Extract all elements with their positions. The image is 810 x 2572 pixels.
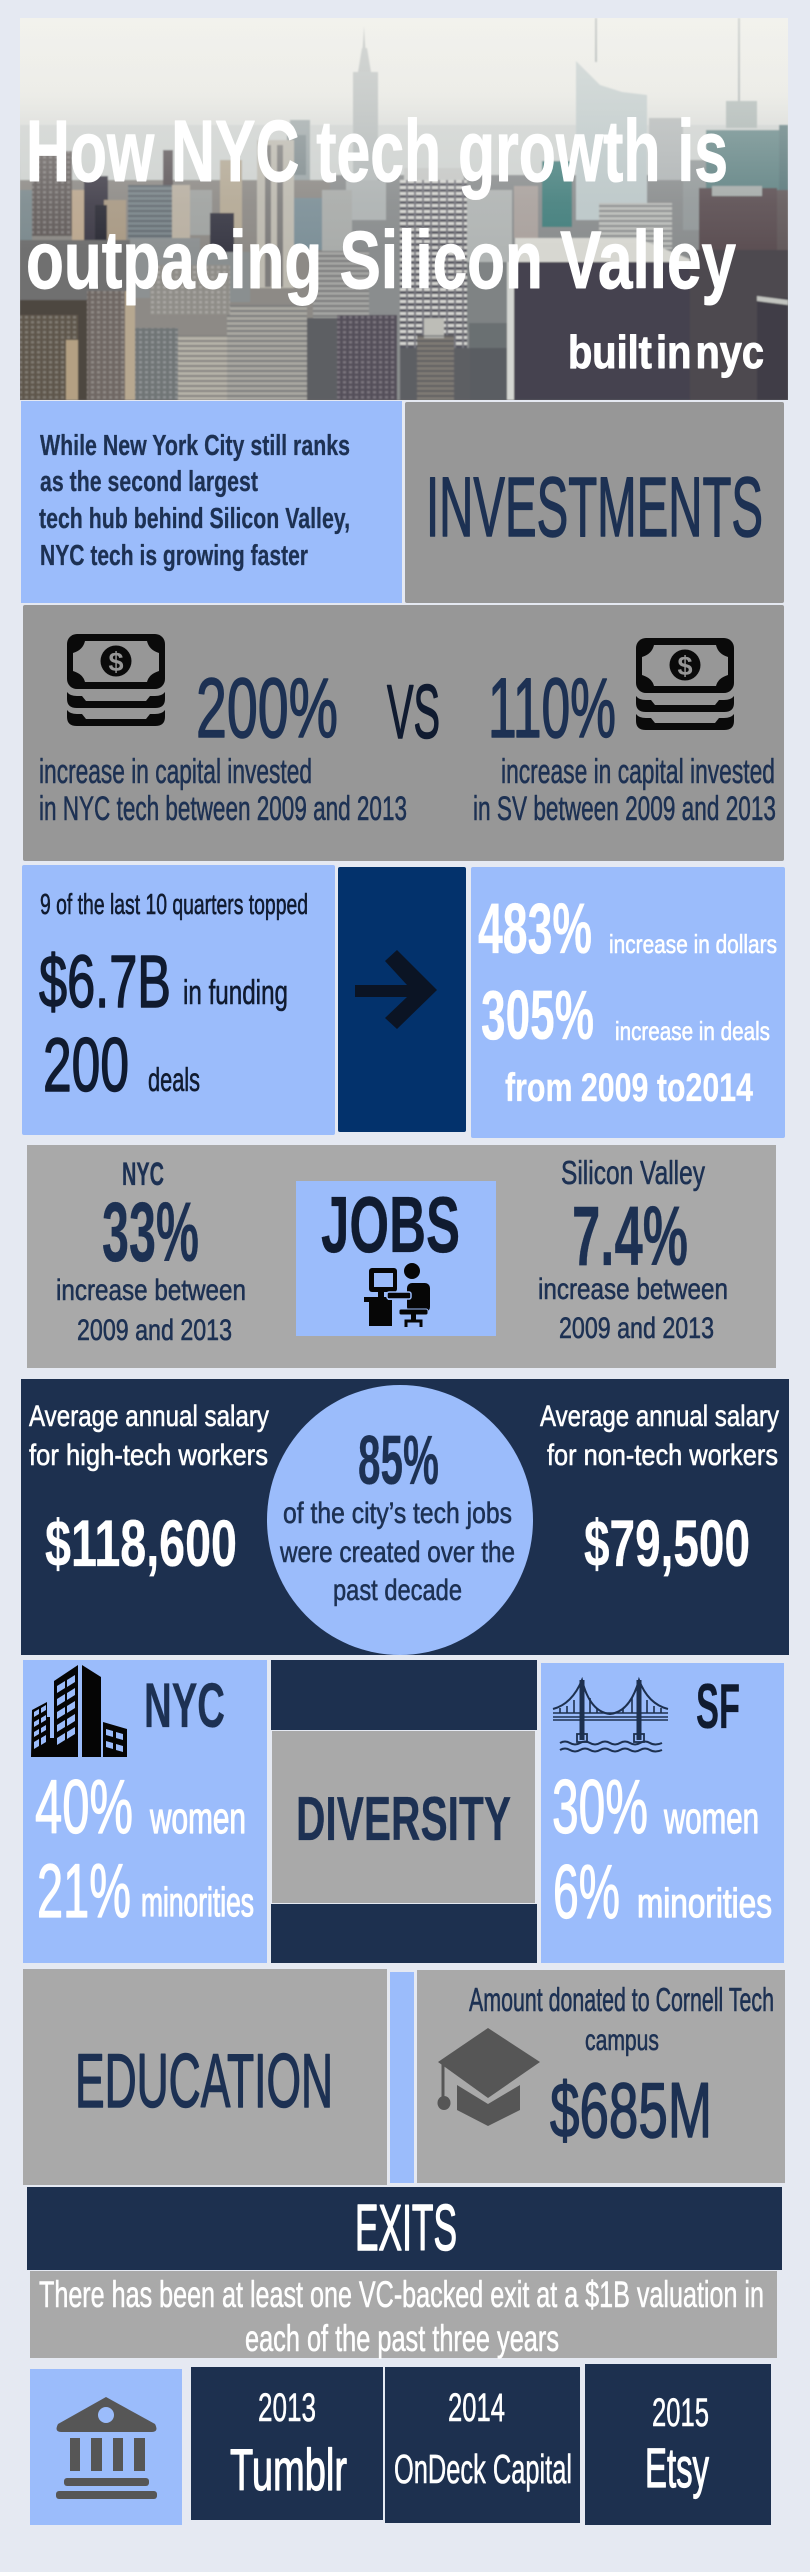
- label: VS: VS: [387, 670, 440, 755]
- quarters note: 9 of the last 10 quarters topped: [40, 889, 308, 921]
- Silicon Valley jobs: increase between: [538, 1273, 728, 1306]
- description text: each of the past three years: [245, 2318, 559, 2359]
- stat: SF women: women: [663, 1794, 759, 1843]
- icon: money stack NYC: [67, 634, 165, 726]
- icon: money stack SV: [636, 638, 734, 730]
- stat: SF women: 30%: [552, 1765, 648, 1850]
- heading: diversity: DIVERSITY: [296, 1785, 511, 1854]
- caption: NYC capital: in NYC tech between 2009 and 2013: [39, 790, 407, 828]
- panel: bank icon: [30, 2369, 182, 2525]
- panel: intro: [21, 401, 402, 603]
- panel: jobs: [27, 1145, 776, 1368]
- intro text: NYC tech is growing faster: [40, 540, 308, 572]
- NYC jobs: [56, 1156, 246, 1347]
- icon: city buildings: [31, 1665, 127, 1757]
- stat: deals growth: [481, 976, 770, 1054]
- company: Etsy: [645, 2436, 709, 2499]
- NYC jobs: NYC: [122, 1156, 164, 1192]
- stat: dollars: 483%: [478, 890, 592, 969]
- stat: SV 110%: 110%: [488, 661, 616, 755]
- Silicon Valley jobs: 7.4%: [572, 1189, 688, 1283]
- panel: funding: [22, 865, 335, 1135]
- logo: built in nyc: built in nyc: [568, 326, 764, 378]
- panel: exits heading: [27, 2187, 782, 2270]
- caption: donation: campus: [585, 2024, 659, 2057]
- stat: dollars: [478, 890, 777, 969]
- company: OnDeck Capital: [394, 2446, 572, 2492]
- heading: exits: EXITS: [355, 2191, 457, 2264]
- panel: education heading: [23, 1969, 387, 2185]
- decorative strip: [390, 1972, 414, 2183]
- icon: arrow: [355, 950, 437, 1029]
- stat: funding: in funding: [183, 974, 288, 1012]
- company: Tumblr: [230, 2438, 347, 2503]
- panel: investments heading: [405, 402, 784, 603]
- high-tech salary: $118,600: [45, 1506, 237, 1580]
- Silicon Valley jobs: Silicon Valley: [561, 1154, 705, 1191]
- caption: SV capital: [473, 753, 776, 828]
- circle: tech jobs created: past decade: [333, 1574, 462, 1607]
- stat: SF minorities: [553, 1850, 772, 1935]
- label: SF: SF: [696, 1672, 740, 1742]
- caption: donation: [469, 1981, 774, 2057]
- Silicon Valley jobs: 2009 and 2013: [559, 1312, 714, 1345]
- panel: hero: [20, 18, 788, 400]
- panel: diversity NYC: [23, 1660, 267, 1963]
- skyline photograph: [20, 18, 788, 400]
- NYC jobs: 33%: [102, 1185, 199, 1279]
- year: 2013: [258, 2386, 316, 2430]
- heading: jobs: JOBS: [321, 1180, 460, 1269]
- stat: deals: 200: [43, 1023, 129, 1108]
- stat: NYC women: 40%: [35, 1765, 133, 1850]
- panel: diversity heading: [271, 1660, 537, 1963]
- circle: tech jobs created: [267, 1385, 533, 1655]
- label: NYC: NYC: [144, 1671, 225, 1741]
- circle: tech jobs created: 85%: [358, 1421, 439, 1499]
- stat: NYC women: women: [149, 1794, 246, 1843]
- non-tech salary: [540, 1400, 779, 1580]
- NYC jobs: 2009 and 2013: [77, 1314, 232, 1347]
- stat: deals: deals: [148, 1061, 200, 1098]
- stat: deals growth: increase in deals: [615, 1016, 770, 1046]
- icon: worker at computer: [364, 1263, 430, 1327]
- panel: exit 2015 Etsy: [585, 2364, 771, 2525]
- caption: NYC capital: [39, 753, 407, 828]
- stat: NYC minorities: 21%: [37, 1849, 131, 1934]
- year: 2014: [448, 2386, 505, 2430]
- icon: money stack SV: $: [677, 651, 693, 681]
- intro text: tech hub behind Silicon Valley,: [39, 503, 350, 535]
- intro text: While New York City still ranks: [40, 430, 350, 462]
- panel: arrow: [338, 867, 466, 1132]
- NYC jobs: increase between: [56, 1274, 246, 1307]
- description text: [39, 2274, 764, 2359]
- stat: SF minorities: minorities: [637, 1880, 772, 1926]
- stat: deals growth: 305%: [481, 976, 594, 1054]
- icon: bridge: [553, 1680, 668, 1752]
- intro text: [39, 430, 350, 572]
- panel: exits description: [30, 2271, 777, 2359]
- icon: money stack NYC: $: [108, 647, 124, 677]
- high-tech salary: for high-tech workers: [29, 1439, 268, 1472]
- high-tech salary: Average annual salary: [29, 1400, 269, 1433]
- panel: exit 2013 Tumblr: [191, 2367, 383, 2520]
- Silicon Valley jobs: [538, 1154, 728, 1345]
- title: [26, 103, 736, 306]
- stat: NYC 200%: 200%: [196, 661, 338, 755]
- icon: graduation cap: [438, 2028, 540, 2126]
- year: 2015: [652, 2391, 709, 2435]
- intro text: as the second largest: [40, 466, 258, 498]
- panel: diversity SF: [541, 1663, 784, 1963]
- circle: tech jobs created: of the city’s tech jobs: [283, 1497, 512, 1530]
- stat: SF minorities: 6%: [553, 1850, 620, 1935]
- heading: education: EDUCATION: [75, 2039, 333, 2124]
- panel: Cornell Tech donation: [417, 1970, 785, 2183]
- stat: funding: $6.7B: [39, 940, 171, 1023]
- icon: bank: [56, 2397, 157, 2499]
- panel: growth: [471, 867, 785, 1138]
- caption: NYC capital: increase in capital invested: [39, 753, 312, 791]
- jobs heading box: [296, 1180, 496, 1336]
- stat: donation: $685M: [550, 2066, 712, 2154]
- high-tech salary: [29, 1400, 269, 1580]
- panel: exit 2014 OnDeck Capital: [385, 2367, 580, 2523]
- stat: NYC minorities: minorities: [141, 1879, 254, 1925]
- circle: tech jobs created: were created over the: [279, 1536, 515, 1569]
- panel: salaries: [21, 1379, 789, 1655]
- panel: capital invested comparison: [23, 605, 784, 861]
